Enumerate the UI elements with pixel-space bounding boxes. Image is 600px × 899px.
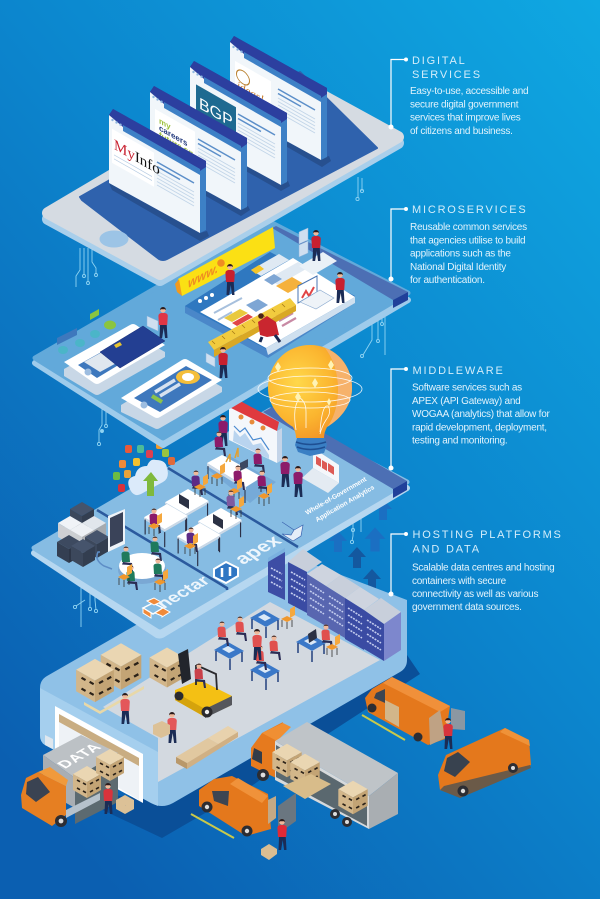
callout: microservices xyxy=(388,204,528,286)
cloud with upload arrow xyxy=(128,460,168,496)
hand cart with parcel xyxy=(153,721,170,738)
description: containers with secure xyxy=(412,576,507,587)
callout: middleware xyxy=(388,365,551,470)
logo: my careers future: my xyxy=(159,116,171,132)
connector xyxy=(388,58,408,130)
icon: tablet with dark screen xyxy=(108,509,125,552)
label: Whole-of-Government Application Analytics: Whole-of-Government xyxy=(304,476,369,517)
phone with profile xyxy=(121,359,222,429)
crouching person on ruler xyxy=(258,313,280,342)
heading: SERVICES xyxy=(412,69,482,81)
microservices platform lip xyxy=(35,227,408,445)
loading bay door xyxy=(45,706,143,803)
phone with card xyxy=(64,324,165,395)
rack slots xyxy=(271,568,381,650)
floating screens xyxy=(147,228,308,367)
layer 3: middleware xyxy=(34,397,407,636)
callout: digital services xyxy=(388,55,528,137)
strip end cap xyxy=(393,481,407,498)
worker xyxy=(443,718,453,749)
flat cartons xyxy=(176,726,238,769)
web page card xyxy=(185,252,355,358)
heading: AND DATA xyxy=(412,544,481,556)
tablet screen xyxy=(80,72,377,260)
warehouse outer shell xyxy=(40,548,407,806)
bulb glass xyxy=(268,345,352,438)
icon: WOGAA logo xyxy=(282,522,303,541)
description: Scalable data centres and hosting xyxy=(412,563,554,574)
van: upper right xyxy=(362,677,465,749)
warehouse side wall shade xyxy=(40,688,158,806)
large articulated truck xyxy=(251,722,398,829)
description: Reusable common services xyxy=(410,222,527,233)
layer 4: hosting platforms and data xyxy=(40,548,407,806)
presenter xyxy=(218,415,228,446)
rack row xyxy=(268,549,401,661)
logo: BGP: BGP xyxy=(199,93,233,131)
callout: hosting platforms and data xyxy=(388,529,563,613)
browser window: ideas xyxy=(230,36,327,160)
trailer open side xyxy=(276,745,367,826)
banner: www: www. xyxy=(188,260,218,291)
logo: my careers future: careers xyxy=(159,123,188,148)
two standing people with laptop xyxy=(280,448,339,497)
browser window: MyInfo xyxy=(109,109,206,233)
description: National Digital Identity xyxy=(410,262,506,273)
window shadows xyxy=(109,108,331,241)
middleware platform surface xyxy=(34,410,407,627)
truck cab xyxy=(21,767,68,827)
chassis xyxy=(66,793,100,818)
description: Easy-to-use, accessible and xyxy=(410,86,528,97)
browser window: BGP xyxy=(190,61,287,185)
description: government data sources. xyxy=(412,602,522,613)
warehouse contents xyxy=(76,606,340,769)
description: for authentication. xyxy=(410,275,485,286)
heading: MIDDLEWARE xyxy=(412,365,505,377)
heading: HOSTING PLATFORMS xyxy=(412,529,563,541)
logo: ideas: ideas! xyxy=(237,78,264,106)
delivery truck at bay xyxy=(21,735,134,827)
icon: nectar logo xyxy=(143,598,170,618)
divider lines xyxy=(97,468,298,590)
heading: DIGITAL xyxy=(412,55,467,67)
analytics board xyxy=(229,397,282,463)
connector xyxy=(388,207,408,282)
van: lower right xyxy=(438,728,531,798)
developer desks xyxy=(144,470,244,566)
cargo box xyxy=(43,735,124,824)
server racks xyxy=(268,548,401,661)
banner: www xyxy=(175,227,275,296)
middleware platform lip xyxy=(34,416,407,636)
translucent panel xyxy=(268,548,285,595)
trailer cab xyxy=(251,722,291,781)
back strip xyxy=(263,405,407,489)
label: nectar: nectar xyxy=(151,573,214,611)
browser window: my careers future xyxy=(150,86,247,210)
bulb base xyxy=(295,438,327,456)
worker with cart xyxy=(103,783,113,814)
connector xyxy=(388,367,408,470)
description: services that improve lives xyxy=(410,113,521,124)
strip end cap xyxy=(393,292,408,308)
app icons row xyxy=(57,309,116,354)
team desk group xyxy=(206,432,276,506)
description: that agencies utilise to build xyxy=(410,235,525,246)
description: rapid development, deployment, xyxy=(412,422,547,433)
layer 2: microservices xyxy=(35,222,408,445)
van: bottom centre xyxy=(191,776,296,860)
icon: stack of cubes xyxy=(57,502,109,567)
logo: MyInfo: MyInfo xyxy=(114,137,160,179)
back strip xyxy=(272,226,408,300)
orbit rings xyxy=(258,368,362,434)
round meeting table xyxy=(118,536,168,592)
laptop xyxy=(302,448,339,493)
crescent highlight xyxy=(325,348,352,427)
description: Software services such as xyxy=(412,383,522,394)
icon: apex logo xyxy=(214,562,238,583)
app icon cluster xyxy=(113,441,175,492)
warehouse workers xyxy=(120,693,130,724)
parking line xyxy=(191,814,234,838)
data flow arrows xyxy=(329,499,392,590)
parking line xyxy=(362,715,405,740)
home button xyxy=(100,230,128,248)
label: Whole-of-Government Application Analytics: Application Analytics xyxy=(314,484,376,524)
trailer cargo xyxy=(272,744,368,814)
circuit traces xyxy=(73,177,385,627)
description: WOGAA (analytics) that allow for xyxy=(412,409,551,420)
connector xyxy=(388,532,408,596)
description: connectivity as well as various xyxy=(412,589,538,600)
cable xyxy=(97,552,112,569)
label: apex: apex xyxy=(230,532,287,568)
description: secure digital government xyxy=(410,99,519,110)
standing people xyxy=(225,264,235,295)
heading: MICROSERVICES xyxy=(412,204,528,216)
logo: my careers future xyxy=(155,109,195,168)
description: testing and monitoring. xyxy=(412,436,507,447)
microservices platform surface xyxy=(35,222,408,438)
warehouse floor xyxy=(103,602,380,782)
worker with trolley xyxy=(277,819,287,850)
ruler xyxy=(208,298,296,357)
description: of citizens and business. xyxy=(410,126,513,137)
tablet edge xyxy=(48,78,398,280)
light bulb xyxy=(258,345,362,456)
logo: my careers future: future.sg xyxy=(159,130,193,159)
stacked cartons xyxy=(76,643,184,714)
layer shadow: ground below warehouse xyxy=(60,655,420,838)
description: APEX (API Gateway) and xyxy=(412,396,520,407)
sparkles xyxy=(275,360,334,406)
label: DATA: DATA xyxy=(54,741,106,771)
office desks and staff xyxy=(214,606,340,690)
tablet surface xyxy=(48,74,398,274)
layer 1: digital services tablet xyxy=(48,36,398,280)
forklift xyxy=(174,649,232,718)
description: applications such as the xyxy=(410,249,511,260)
